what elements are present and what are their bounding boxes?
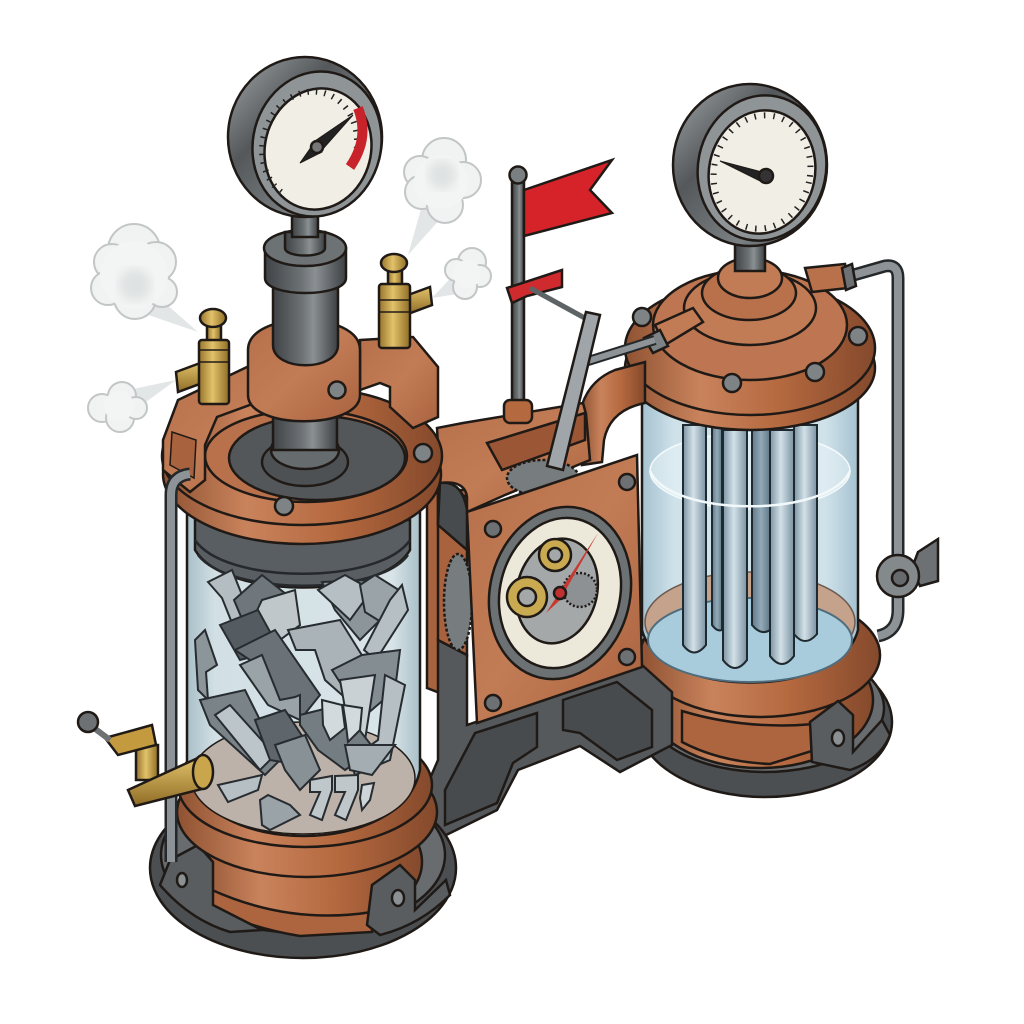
right pressure gauge: [673, 83, 840, 271]
right side pipe and valve: [842, 264, 938, 636]
left strut: [427, 485, 440, 693]
flag: [504, 160, 612, 423]
iron bridge base: [425, 640, 672, 838]
left pressure gauge: [228, 57, 397, 230]
steam clouds: [88, 138, 491, 432]
lever: [547, 312, 600, 470]
right vessel: [625, 83, 938, 797]
clock plate: [467, 455, 649, 723]
left side pipe: [171, 474, 190, 862]
piston under flange: [195, 520, 410, 588]
scrap metal pieces: [195, 570, 408, 830]
left vessel: [78, 57, 456, 958]
rear frame and arch: [437, 403, 590, 655]
steam right: [432, 248, 491, 299]
steam top: [404, 138, 481, 255]
right inner tubes: [683, 425, 817, 668]
steam lower left: [88, 380, 176, 432]
right arch and rod: [582, 340, 655, 465]
brass drain tap: [78, 712, 213, 806]
right base: [638, 593, 892, 797]
steam upper left: [91, 224, 198, 332]
left glass cylinder: [187, 500, 420, 836]
left top flange: [162, 367, 442, 544]
right top flange: [625, 258, 875, 430]
brass steam valves: [176, 254, 432, 404]
gear wheels behind: [444, 460, 579, 650]
right glass cylinder: [642, 395, 858, 682]
centre mechanism: [425, 160, 672, 838]
left piston column: [248, 212, 438, 486]
left base: [150, 723, 456, 958]
